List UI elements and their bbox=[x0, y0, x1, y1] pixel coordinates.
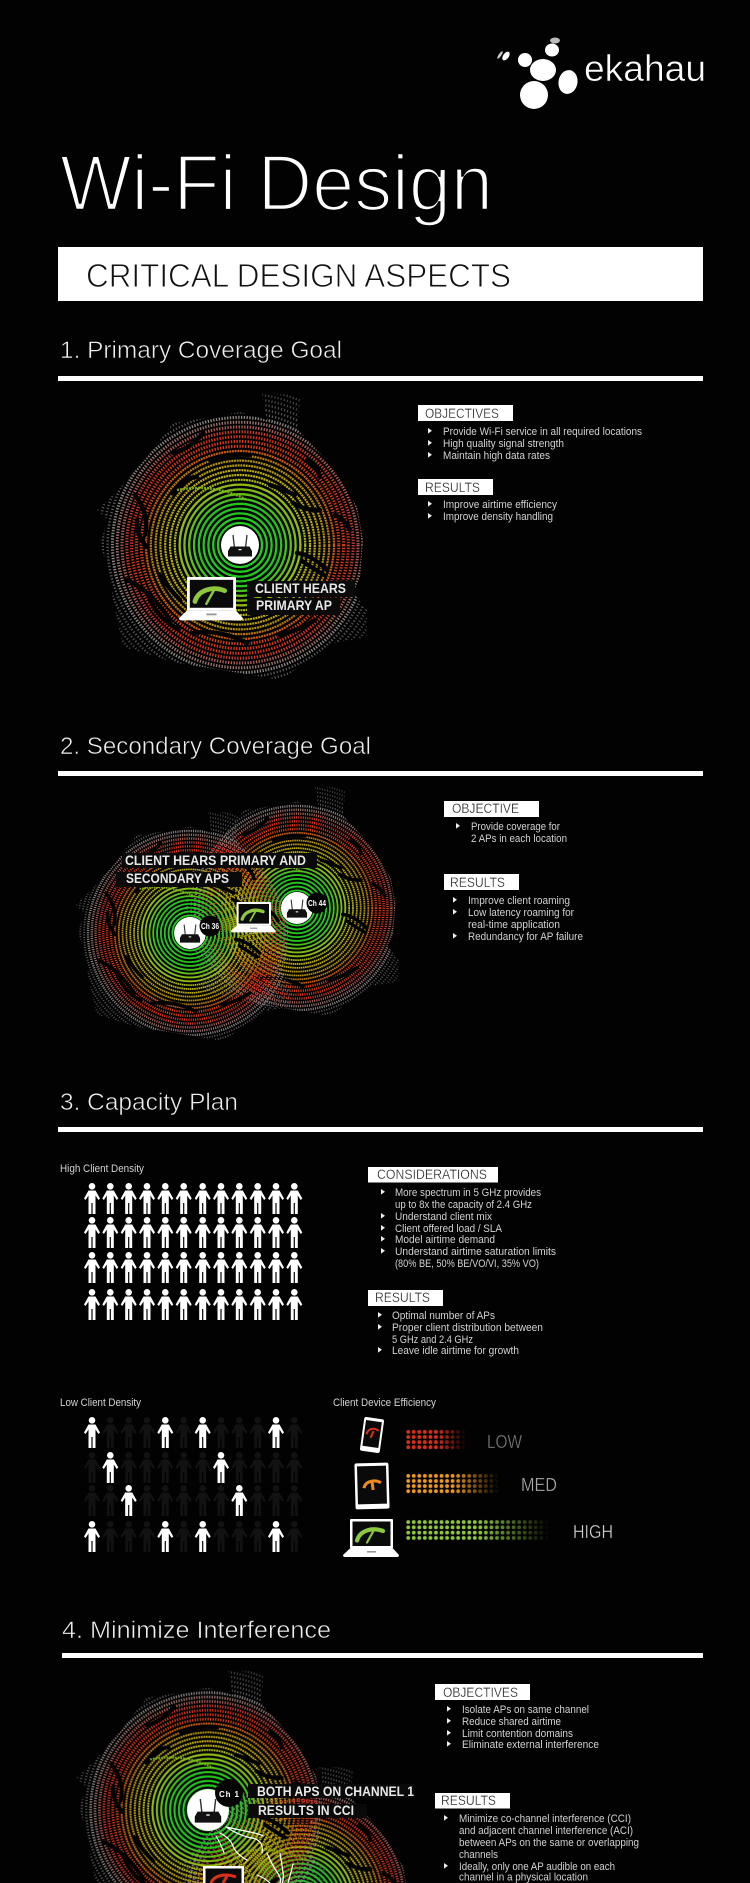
text block: considerations: Understand client mix bbox=[395, 1211, 493, 1223]
icon: laptop with green gauge bbox=[179, 577, 243, 620]
chart: low client density bbox=[60, 1397, 302, 1552]
icon: access point channel 36 bbox=[174, 916, 220, 949]
icon: laptop with red gauge, cropped by the page edge bbox=[203, 1866, 244, 1883]
chart: high client density bbox=[60, 1163, 302, 1320]
text block: section 2 results: Improve client roaming bbox=[468, 895, 570, 907]
banner: critical design aspects: CRITICAL DESIGN ASPECTS bbox=[86, 257, 511, 294]
icon: access point channel 44: Ch 44 bbox=[308, 899, 326, 908]
text block: section 2 objective: 2 APs in each location bbox=[471, 833, 567, 845]
text block: section 3 results: 5 GHz and 2.4 GHz bbox=[392, 1334, 473, 1346]
section 1 heading: 1. Primary Coverage Goal bbox=[60, 337, 342, 364]
heatmap: primary coverage bbox=[84, 389, 396, 701]
text block: section 2 objective bbox=[444, 801, 567, 845]
text block: section 1 objectives: OBJECTIVES bbox=[425, 406, 499, 421]
text block: section 4 results: RESULTS bbox=[441, 1793, 496, 1808]
text block: considerations: More spectrum in 5 GHz provides bbox=[395, 1187, 542, 1199]
text block: section 2 results: real-time application bbox=[468, 919, 560, 931]
text block: section 3 results: Proper client distribution between bbox=[392, 1322, 543, 1334]
callout: both APs on channel 1 results in CCI: BOTH APS ON CHANNEL 1 bbox=[257, 1784, 414, 1799]
callout: client hears primary and secondary APs: SECONDARY APS bbox=[126, 871, 229, 886]
title: Wi-Fi Design bbox=[60, 138, 493, 227]
icon: laptop bbox=[231, 902, 276, 932]
section 3 heading bbox=[58, 1089, 703, 1132]
text block: section 3 results bbox=[368, 1290, 543, 1357]
icon: tablet, medium efficiency bbox=[354, 1463, 390, 1509]
icon: access point channel 44 bbox=[281, 892, 328, 924]
callout: both APs on channel 1 results in CCI bbox=[248, 1784, 415, 1818]
text block: section 1 objectives: Maintain high data rates bbox=[443, 450, 551, 462]
text block: considerations: CONSIDERATIONS bbox=[377, 1167, 487, 1182]
text block: considerations: Model airtime demand bbox=[395, 1234, 495, 1246]
icon: phone, low efficiency bbox=[360, 1417, 384, 1453]
text block: considerations: Client offered load / SLA bbox=[395, 1223, 503, 1235]
text block: section 1 objectives bbox=[418, 405, 643, 462]
callout: client hears primary AP: CLIENT HEARS bbox=[255, 581, 346, 596]
callout: client hears primary AP bbox=[247, 581, 355, 615]
text block: section 1 results: Improve density handling bbox=[443, 511, 553, 523]
chart: client device efficiency bbox=[333, 1397, 613, 1557]
text block: section 2 results: RESULTS bbox=[450, 875, 505, 890]
callout: both APs on channel 1 results in CCI: RESULTS IN CCI bbox=[258, 1803, 354, 1818]
section 4 heading: 4. Minimize Interference bbox=[62, 1617, 331, 1644]
section 3 heading: 3. Capacity Plan bbox=[60, 1089, 238, 1116]
label: high: HIGH bbox=[573, 1522, 613, 1542]
label: low: LOW bbox=[487, 1432, 522, 1452]
text block: section 4 results: Minimize co-channel interference (CCI) bbox=[459, 1813, 631, 1825]
text block: section 4 results: and adjacent channel interference (ACI) bbox=[459, 1825, 633, 1837]
text block: section 3 results: RESULTS bbox=[375, 1290, 430, 1305]
banner: critical design aspects bbox=[58, 247, 703, 301]
text block: section 3 results: Leave idle airtime for growth bbox=[392, 1345, 519, 1357]
text block: section 2 results bbox=[444, 874, 583, 943]
callout: client hears primary and secondary APs: CLIENT HEARS PRIMARY AND bbox=[125, 853, 306, 868]
text block: considerations bbox=[368, 1167, 557, 1270]
text block: section 4 objectives: OBJECTIVES bbox=[443, 1685, 518, 1700]
interference waves bbox=[216, 1827, 293, 1883]
icon: access point channel 1: Ch 1 bbox=[219, 1790, 240, 1799]
text block: section 4 results: channels bbox=[459, 1849, 499, 1861]
logo: ekahau: ekahau bbox=[584, 48, 706, 89]
logo: ekahau bbox=[496, 38, 706, 109]
text block: section 4 objectives bbox=[435, 1684, 599, 1751]
section 1 heading bbox=[58, 337, 703, 381]
icon: access point channel 36: Ch 36 bbox=[201, 922, 219, 931]
text block: section 4 objectives: Limit contention domains bbox=[462, 1728, 574, 1740]
text block: section 4 results bbox=[435, 1793, 639, 1883]
text block: considerations: Understand airtime saturation limits bbox=[395, 1246, 557, 1258]
heatmap: minimize interference bbox=[60, 1670, 420, 1883]
callout: client hears primary and secondary APs bbox=[116, 853, 317, 887]
text block: section 4 objectives: Reduce shared airtime bbox=[462, 1716, 561, 1728]
text block: section 1 results: RESULTS bbox=[425, 480, 480, 495]
icon: laptop, high efficiency bbox=[343, 1519, 399, 1557]
heatmap: secondary coverage bbox=[65, 783, 422, 1058]
chart: low client density: Low Client Density bbox=[60, 1397, 142, 1409]
bar: low efficiency dots bbox=[406, 1429, 466, 1450]
text block: section 2 objective: OBJECTIVE bbox=[452, 801, 519, 816]
bar: high efficiency dots bbox=[406, 1519, 550, 1541]
text block: section 3 results: Optimal number of APs bbox=[392, 1310, 496, 1322]
label: med: MED bbox=[521, 1475, 557, 1495]
text block: section 4 objectives: Isolate APs on same channel bbox=[462, 1704, 589, 1716]
text block: considerations: up to 8x the capacity of 2.4 GHz bbox=[395, 1199, 532, 1211]
text block: section 2 results: Low latency roaming for bbox=[468, 907, 574, 919]
section 4 heading bbox=[62, 1617, 703, 1658]
icon: access point bbox=[221, 526, 259, 564]
bar: medium efficiency dots bbox=[406, 1473, 500, 1494]
text block: considerations: (80% BE, 50% BE/VO/VI, 35% VO) bbox=[395, 1258, 539, 1270]
text block: section 1 objectives: High quality signal strength bbox=[443, 438, 564, 450]
text block: section 4 results: Ideally, only one AP audible on each bbox=[459, 1861, 615, 1873]
text block: section 2 objective: Provide coverage for bbox=[471, 821, 560, 833]
chart: client device efficiency: Client Device Efficiency bbox=[333, 1397, 437, 1409]
icon: access point channel 1 bbox=[187, 1779, 243, 1831]
chart: high client density: High Client Density bbox=[60, 1163, 145, 1175]
text block: section 4 objectives: Eliminate external interference bbox=[462, 1739, 599, 1751]
text block: section 1 results: Improve airtime efficiency bbox=[443, 499, 558, 511]
callout: client hears primary AP: PRIMARY AP bbox=[256, 598, 332, 613]
text block: section 2 results: Redundancy for AP failure bbox=[468, 931, 583, 943]
section 2 heading: 2. Secondary Coverage Goal bbox=[60, 733, 371, 760]
text block: section 4 results: between APs on the same or overlapping bbox=[459, 1837, 639, 1849]
text block: section 1 objectives: Provide Wi-Fi service in all required locations bbox=[443, 426, 643, 438]
text block: section 1 results bbox=[418, 479, 558, 523]
section 2 heading bbox=[58, 733, 703, 776]
